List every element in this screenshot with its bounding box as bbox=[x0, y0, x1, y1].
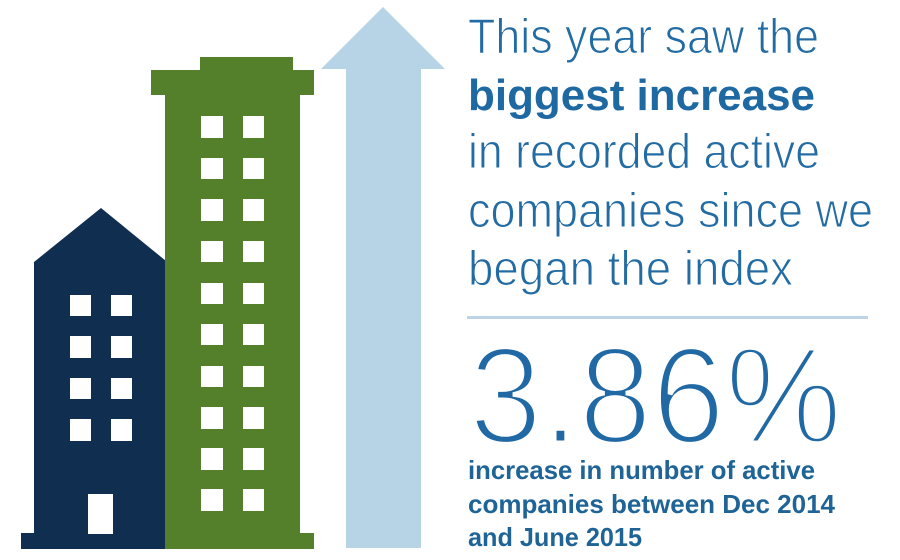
statistic description: companies between Dec 2014 bbox=[468, 489, 836, 519]
icon: navy building bbox=[21, 208, 166, 549]
headline bbox=[468, 10, 873, 296]
divider line bbox=[467, 316, 868, 319]
headline: biggest increase bbox=[468, 71, 815, 120]
big statistic: 3.86%: 3.86% bbox=[469, 319, 842, 473]
statistic description: and June 2015 bbox=[468, 522, 642, 552]
headline: companies since we bbox=[468, 184, 873, 238]
headline: This year saw the bbox=[468, 10, 819, 64]
headline: in recorded active bbox=[468, 125, 820, 179]
headline: began the index bbox=[468, 242, 793, 296]
icon: green building bbox=[151, 57, 314, 549]
icon: upward arrow bbox=[321, 7, 445, 548]
statistic description bbox=[468, 455, 836, 552]
statistic description: increase in number of active bbox=[468, 455, 815, 485]
